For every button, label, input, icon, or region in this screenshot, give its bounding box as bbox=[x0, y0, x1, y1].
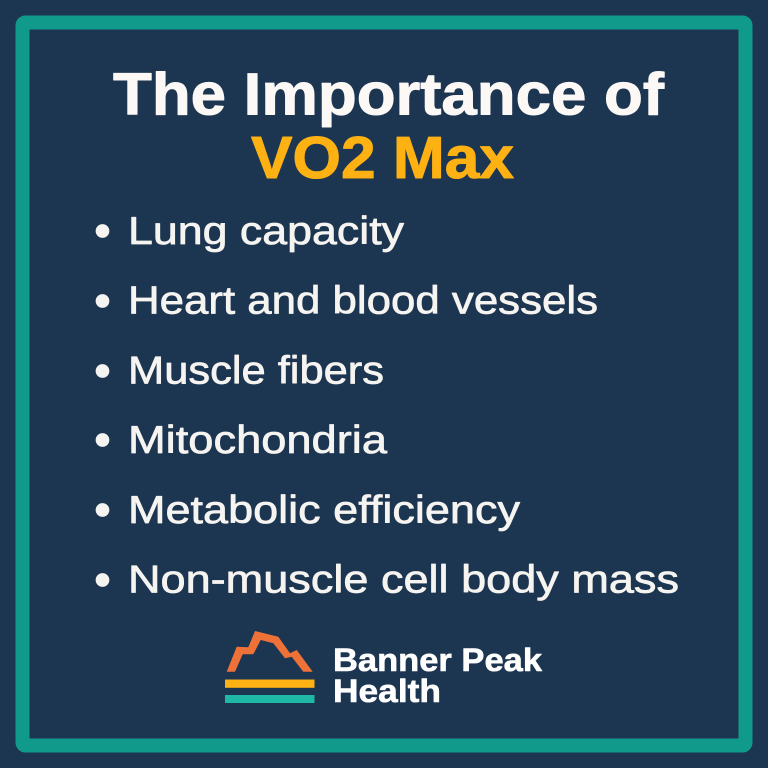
icon: teal bar bbox=[225, 695, 314, 703]
logo wordmark bbox=[333, 642, 542, 709]
list item: muscle fibers: Muscle fibers bbox=[128, 350, 384, 392]
list item: non-muscle cell body mass: Non-muscle cell body mass bbox=[128, 558, 679, 602]
wordmark line 2: Health bbox=[333, 673, 441, 709]
title line 1: The Importance of bbox=[113, 60, 664, 128]
title line 2: VO2 Max: VO2 Max bbox=[251, 124, 514, 191]
list item: metabolic efficiency: Metabolic efficiency bbox=[128, 489, 521, 532]
icon: yellow bar bbox=[225, 680, 314, 688]
title bbox=[113, 60, 664, 191]
list item: mitochondria: Mitochondria bbox=[128, 419, 387, 462]
logo: Banner Peak Health bbox=[225, 631, 542, 709]
list item: heart and blood vessels: Heart and blood vessels bbox=[128, 280, 598, 322]
wordmark line 1: Banner Peak bbox=[333, 642, 542, 678]
bullet list bbox=[96, 210, 679, 602]
icon: orange mountain peak bbox=[227, 631, 313, 672]
list item: lung capacity: Lung capacity bbox=[128, 210, 405, 253]
